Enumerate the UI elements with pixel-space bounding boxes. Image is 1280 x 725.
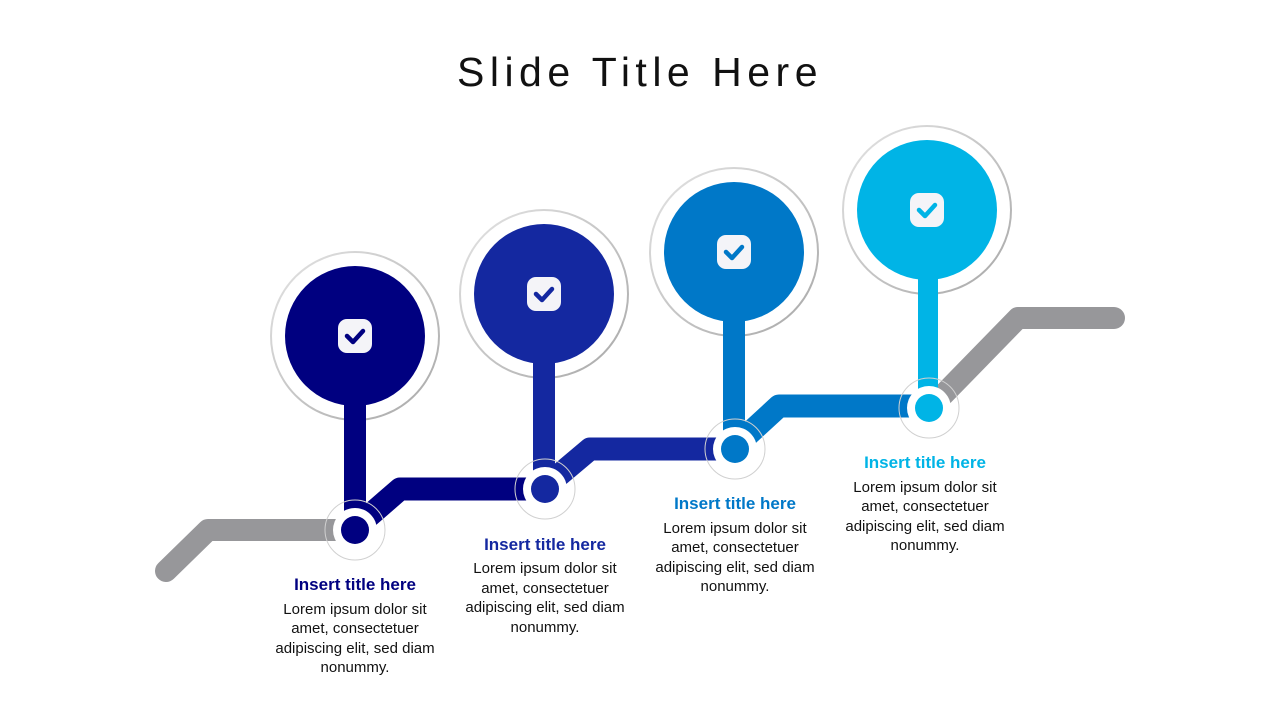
icon: check — [717, 235, 751, 269]
text block 4 — [845, 453, 1005, 554]
text block 4: Insert title here — [864, 453, 986, 472]
text block 2: amet, consectetuer — [481, 580, 609, 597]
text block 1: adipiscing elit, sed diam — [275, 640, 435, 657]
text block 1: Insert title here — [294, 575, 416, 594]
icon: check — [338, 319, 372, 353]
connector segment 3 — [741, 406, 918, 441]
step 3 marker — [650, 168, 818, 479]
title: Slide Title Here — [457, 49, 823, 95]
text block 4: Lorem ipsum dolor sit — [853, 479, 998, 496]
text block 1: nonummy. — [321, 659, 389, 676]
connector segment 1 — [362, 489, 535, 522]
text block 1: amet, consectetuer — [291, 620, 419, 637]
text block 2: nonummy. — [511, 619, 579, 636]
icon: check — [910, 193, 944, 227]
text block 3: amet, consectetuer — [671, 539, 799, 556]
gray right track — [940, 318, 1114, 398]
step 2 marker — [460, 210, 628, 519]
step 1 marker — [271, 252, 439, 560]
text block 4: amet, consectetuer — [861, 498, 989, 515]
icon: check — [527, 277, 561, 311]
text block 4: adipiscing elit, sed diam — [845, 518, 1005, 535]
text block 3: Insert title here — [674, 494, 796, 513]
text block 1: Lorem ipsum dolor sit — [283, 601, 428, 618]
text block 2: Insert title here — [484, 535, 606, 554]
text block 2: Lorem ipsum dolor sit — [473, 560, 618, 577]
text block 3: Lorem ipsum dolor sit — [663, 520, 808, 537]
text block 2 — [465, 535, 625, 636]
step 4 marker — [843, 126, 1011, 438]
text block 3: nonummy. — [701, 578, 769, 595]
text block 2: adipiscing elit, sed diam — [465, 599, 625, 616]
gray left track — [166, 530, 335, 571]
text block 3 — [655, 494, 815, 595]
connector segment 2 — [552, 449, 724, 481]
text block 3: adipiscing elit, sed diam — [655, 559, 815, 576]
text block 4: nonummy. — [891, 537, 959, 554]
text block 1 — [275, 575, 435, 676]
